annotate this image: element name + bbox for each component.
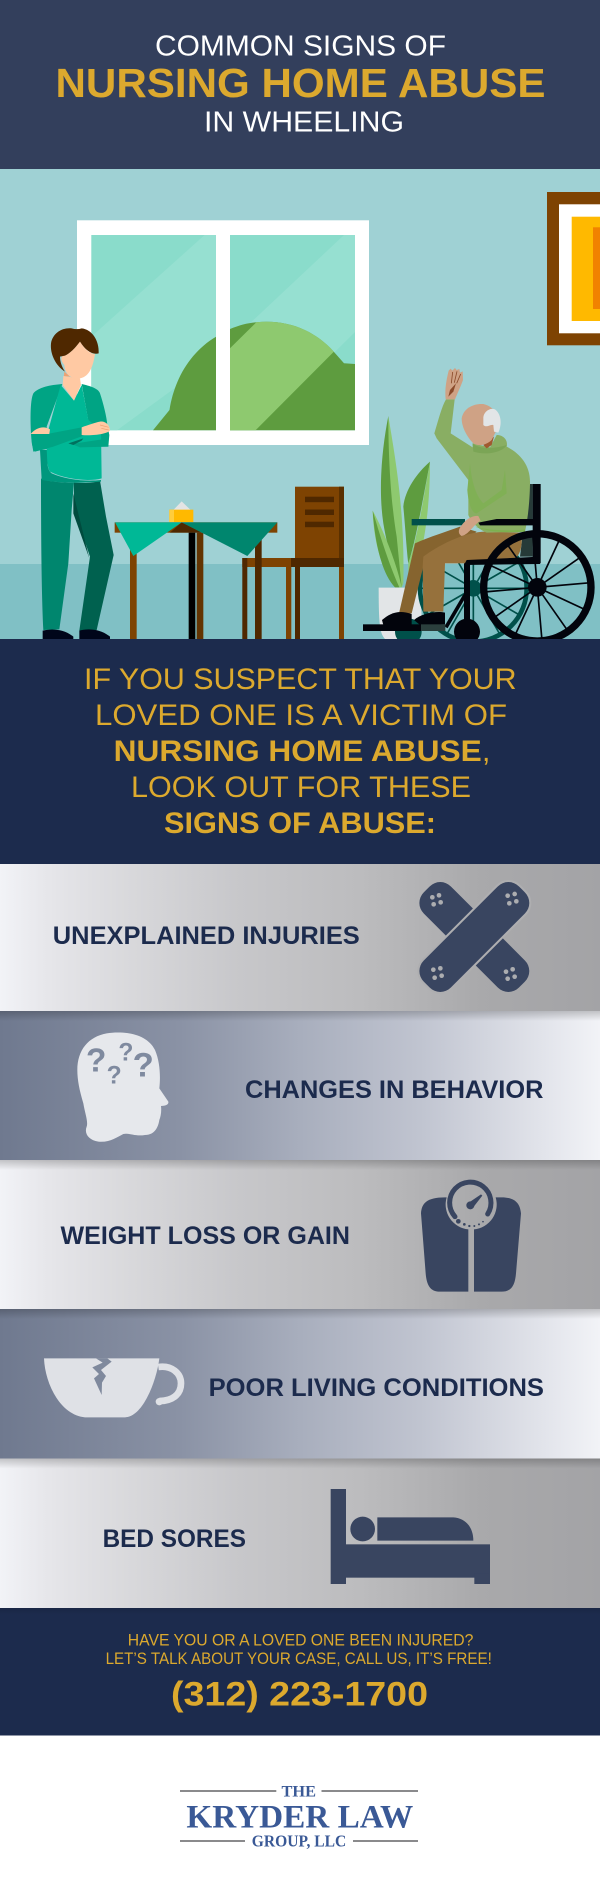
icon: head with question marks: ?	[86, 1043, 106, 1080]
title line 1: COMMON SIGNS OF	[155, 30, 446, 62]
icon: person in bed	[331, 1489, 490, 1584]
logo the: THE	[282, 1784, 316, 1801]
question line: HAVE YOU OR A LOVED ONE BEEN INJURED?	[128, 1630, 473, 1650]
label: BED SORES	[103, 1525, 246, 1553]
icon: weighing scale	[421, 1182, 521, 1292]
intro line 4: LOOK OUT FOR THESE	[131, 771, 471, 804]
resident head	[483, 437, 494, 448]
flower pot	[379, 588, 422, 639]
header banner	[0, 0, 600, 169]
comma: ,	[482, 735, 490, 768]
nurse figure	[31, 328, 114, 639]
raised hand	[445, 368, 463, 399]
potted plant, wheelchair and elderly resident	[363, 368, 591, 645]
logo name: KRYDER LAW	[186, 1799, 413, 1835]
label: WEIGHT LOSS OR GAIN	[60, 1222, 350, 1250]
resident shoes	[382, 612, 412, 625]
band 3: weight loss or gain	[0, 1160, 600, 1309]
intro line 2: LOVED ONE IS A VICTIM OF	[95, 699, 507, 732]
large front wheel	[484, 534, 591, 641]
intro line 5: SIGNS OF ABUSE:	[164, 807, 436, 840]
plant leaves	[373, 416, 430, 587]
icon: head with question marks: ?	[133, 1047, 154, 1085]
icon: head with question marks: ?	[118, 1040, 133, 1067]
icon: head with question marks: ?	[107, 1062, 122, 1089]
resident legs	[399, 527, 477, 613]
label: UNEXPLAINED INJURIES	[53, 922, 360, 950]
title line 2: NURSING HOME ABUSE	[56, 60, 546, 106]
call to action panel	[0, 1608, 600, 1736]
armrests and frame	[412, 519, 465, 525]
icon: head with question marks	[77, 1032, 168, 1142]
window	[77, 220, 369, 445]
floor	[0, 564, 600, 639]
band 5: bed sores	[0, 1458, 600, 1608]
chair back	[526, 484, 533, 520]
dining chair	[242, 487, 344, 639]
intro line 3: NURSING HOME ABUSE	[114, 735, 482, 768]
label: CHANGES IN BEHAVIOR	[245, 1076, 543, 1104]
call line: LET’S TALK ABOUT YOUR CASE, CALL US, IT’S FREE!	[106, 1649, 492, 1668]
logo group: GROUP, LLC	[252, 1832, 346, 1851]
intro panel	[0, 639, 600, 864]
band 2: changes in behavior	[0, 1011, 600, 1160]
band 4: poor living conditions	[0, 1309, 600, 1458]
resident hand on lap	[459, 516, 481, 536]
illustration: nursing home room	[0, 169, 600, 645]
framed picture	[547, 192, 600, 345]
icon: broken cup	[44, 1358, 181, 1417]
phone number: (312) 223-1700	[171, 1676, 428, 1714]
intro line 1: IF YOU SUSPECT THAT YOUR	[84, 663, 517, 696]
resident sweater and raised arm	[434, 399, 530, 533]
table with tablecloth and tissue box	[115, 501, 277, 639]
title line 3: IN WHEELING	[204, 107, 404, 139]
rear wheel	[420, 535, 527, 642]
wall	[0, 169, 600, 564]
footer logo: The Kryder Law Group, LLC	[0, 1736, 600, 1895]
label: POOR LIVING CONDITIONS	[209, 1374, 544, 1402]
icon: crossed bandages	[413, 876, 535, 998]
band 1: unexplained injuries	[0, 864, 600, 1011]
